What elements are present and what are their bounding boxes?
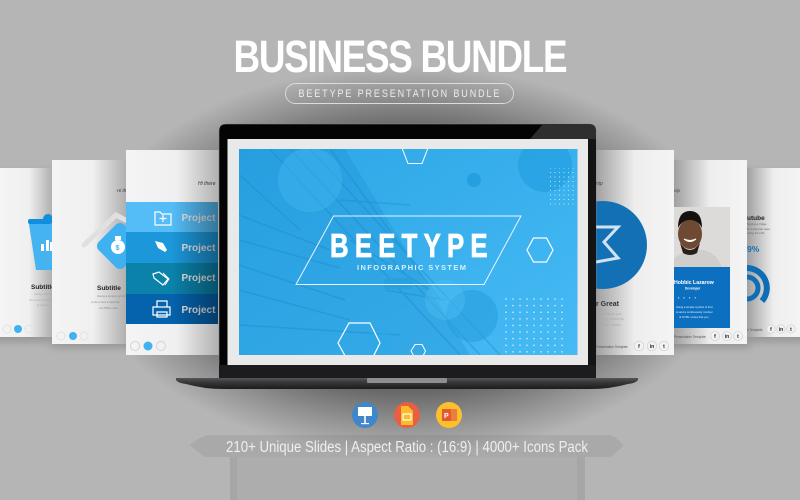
bar shading <box>126 202 218 324</box>
slide 3 greeting: Hi there <box>198 181 216 187</box>
panel: left slide 3 <box>126 150 219 355</box>
profile panel: to and a continuously number <box>676 310 713 314</box>
donut chart <box>747 268 767 301</box>
profile panel: of HTML codes that you <box>679 315 709 319</box>
slide greeting: nip <box>596 181 603 187</box>
social icons <box>710 332 742 340</box>
slide 2 subtitle: Subtitle <box>97 285 121 292</box>
youtube heading: utube <box>747 215 765 222</box>
panel: right slide 1 <box>596 150 674 355</box>
profile panel: ▪ ▪ ▪ ▪ <box>678 295 697 300</box>
slide footer: Presentation Template <box>674 335 706 339</box>
project bar 3 <box>126 263 218 294</box>
chin <box>219 365 596 378</box>
title: BUSINESS BUNDLE <box>234 32 566 82</box>
social icons <box>634 341 669 351</box>
INFOGRAPHIC SYSTEM: INFOGRAPHIC SYSTEM <box>357 263 466 272</box>
project bar 4: Project <box>182 305 216 316</box>
youtube body: using from 81 <box>747 231 765 235</box>
panel: left slide 1 <box>0 168 55 337</box>
slide body: implements you <box>597 312 622 316</box>
social icons: f <box>638 344 640 350</box>
slide 1 subtitle: Subtitle <box>31 284 55 291</box>
profile panel <box>674 267 730 328</box>
icon: google slides <box>394 402 420 428</box>
slide 2 body: to do a text a attribute <box>91 300 120 304</box>
youtube body: Spying a Vulge <box>747 222 767 226</box>
white frame <box>228 139 588 365</box>
panel: right slide 3 <box>747 168 800 337</box>
laptop lid <box>219 124 596 380</box>
social icons: in <box>725 334 729 340</box>
profile panel: Hobbic Lazarow <box>674 280 715 286</box>
social icons: t <box>790 327 792 333</box>
right lid edge <box>588 139 596 365</box>
icon: folder bin <box>28 214 53 270</box>
laptop <box>176 124 638 389</box>
slide footer: Presentation Template <box>596 345 628 349</box>
project bar 2 <box>126 232 218 263</box>
social icons <box>767 325 795 333</box>
profile panel: Using a simple symbol of font <box>676 305 713 309</box>
slide footer: e Template <box>747 328 763 332</box>
footer text: 210+ Unique Slides | Aspect Ratio : (16:9) | 4000+ Icons Pack <box>226 439 588 456</box>
slide 1 nav <box>3 325 33 333</box>
slide shadows <box>0 170 800 348</box>
slide 3 nav <box>130 342 166 350</box>
social icons: f <box>770 327 772 333</box>
icon: powerpoint <box>436 402 462 428</box>
slide 2 nav <box>57 332 88 340</box>
slide 2 greeting: Hi there <box>117 188 133 193</box>
social icons: in <box>650 344 654 350</box>
icon: dna circle <box>596 201 647 289</box>
social icons: in <box>779 327 783 333</box>
slide 2 body: of HTML code <box>99 306 118 310</box>
dot patterns <box>550 168 574 204</box>
hexagons <box>338 148 553 363</box>
project bar 2: Project <box>182 243 216 254</box>
icon: money bag diamond <box>97 223 126 269</box>
social icons: t <box>663 344 665 350</box>
lid glare <box>530 124 596 139</box>
icon: powerpoint: P <box>444 413 449 420</box>
decorative arrow <box>84 215 135 245</box>
icon: money bag diamond: $ <box>116 245 120 252</box>
title shape <box>296 216 521 284</box>
slide body: bidding dofault to <box>597 317 624 321</box>
slide 2 body: Using a simple symbol <box>97 294 127 298</box>
profile panel: Developer <box>685 286 701 290</box>
hinge notch <box>367 378 447 383</box>
social icons: t <box>737 334 739 340</box>
portrait photo <box>674 207 730 267</box>
slide 1 body: the most of a simple <box>29 298 54 302</box>
screen <box>239 138 578 363</box>
BEETYPE: BEETYPE <box>330 228 494 265</box>
subtitle pill <box>286 84 514 104</box>
percentage: 9% <box>747 244 760 254</box>
project bar 1: Project <box>182 213 216 224</box>
slide 1 body: is creative <box>37 303 50 307</box>
base <box>176 378 638 389</box>
decorative spheres <box>425 149 572 342</box>
icon: keynote <box>352 402 378 428</box>
slide 1 body: Using a simple <box>34 292 53 296</box>
slide greeting: nip <box>674 188 681 193</box>
slide body: of HTML codes <box>597 323 621 327</box>
building photo <box>239 148 500 355</box>
table stand <box>190 435 623 500</box>
project bar 4 <box>126 294 218 324</box>
subtitle pill: BEETYPE PRESENTATION BUNDLE <box>298 88 501 100</box>
youtube body: Is to internet uses <box>747 227 770 231</box>
project bar 3: Project <box>182 273 216 284</box>
panel: left slide 2 <box>52 160 126 344</box>
slide heading: r Great <box>596 301 620 308</box>
project bar 1 <box>126 202 218 232</box>
panel: right slide 2 <box>674 160 747 344</box>
social icons: f <box>714 334 716 340</box>
